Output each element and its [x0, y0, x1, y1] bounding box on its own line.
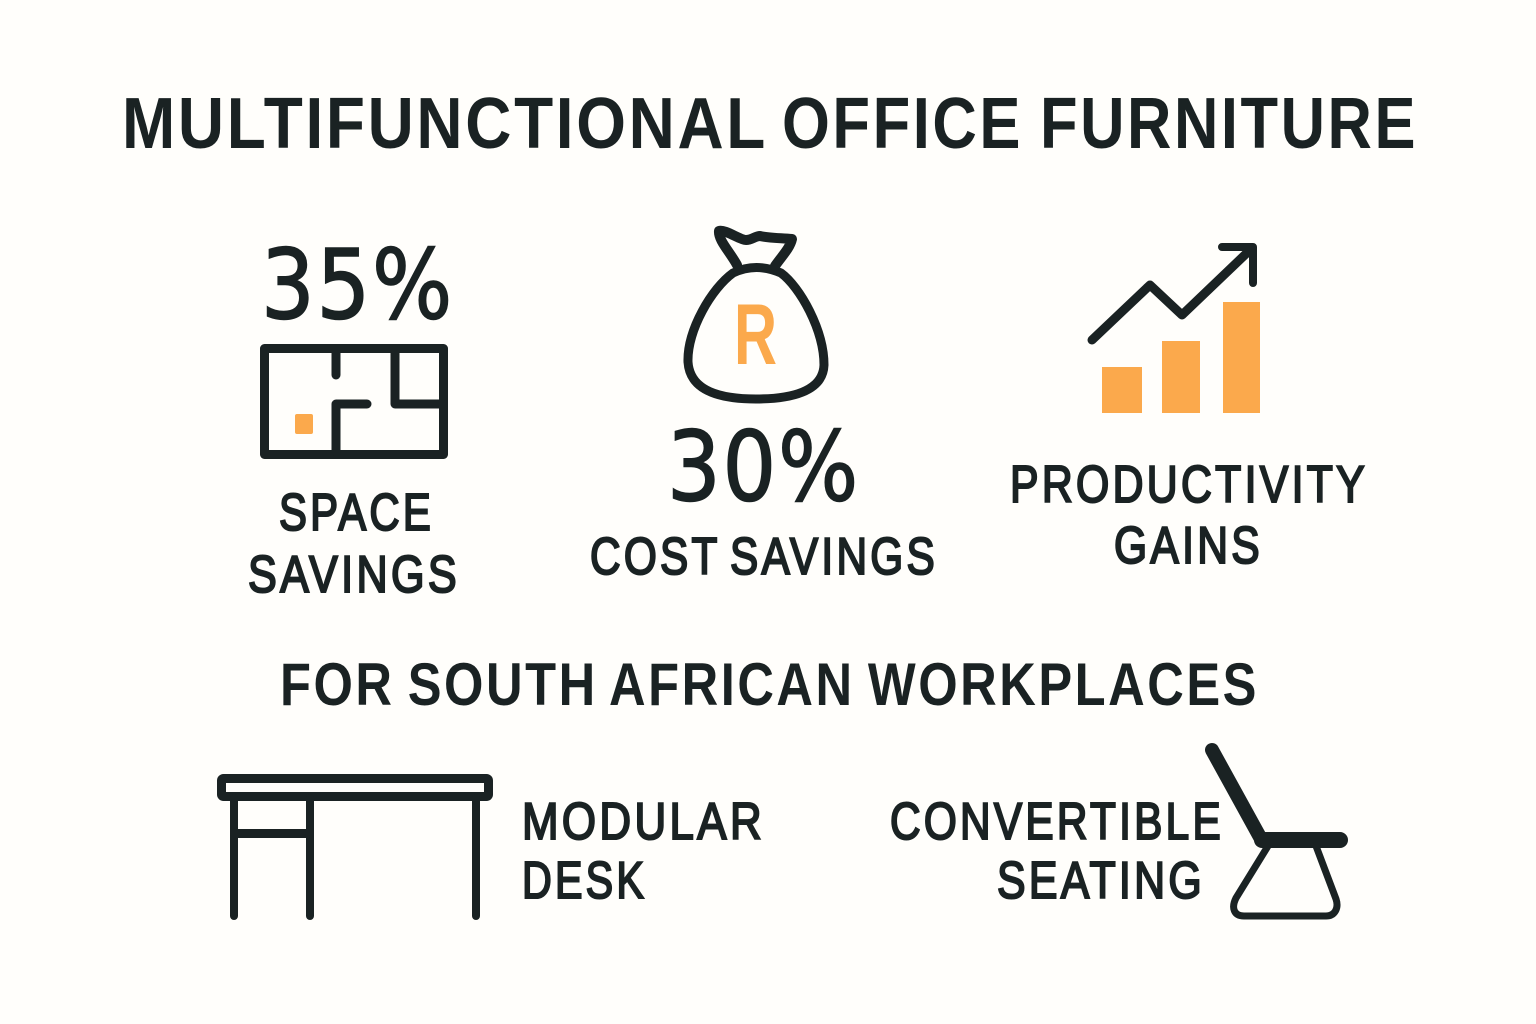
- label: modular desk: [522, 793, 765, 910]
- label: productivity gains: [1010, 456, 1368, 575]
- label: convertible seating: SEATING: [997, 852, 1205, 910]
- title: OFFICE: [782, 84, 1023, 164]
- title: FURNITURE: [1040, 84, 1418, 164]
- label: convertible seating: [890, 793, 1224, 910]
- label: modular desk: DESK: [522, 852, 647, 910]
- panel: space savings: [248, 229, 460, 604]
- label: productivity gains: PRODUCTIVITY: [1010, 456, 1368, 514]
- icon: chair: [1212, 750, 1340, 916]
- label: cost savings: COST SAVINGS: [590, 528, 938, 586]
- panel: cost savings: [590, 231, 938, 586]
- panel: modular desk: [222, 778, 765, 916]
- label: productivity gains: GAINS: [1114, 517, 1263, 575]
- title: MULTIFUNCTIONAL: [122, 84, 768, 164]
- panel: productivity gains: [1010, 247, 1368, 575]
- icon: floor plan: [264, 348, 444, 454]
- panel: convertible seating: [890, 750, 1340, 916]
- stat: 35%: 35%: [261, 229, 454, 341]
- icon: growth chart: [1092, 247, 1260, 413]
- label: space savings: SAVINGS: [248, 546, 460, 604]
- label: modular desk: MODULAR: [522, 793, 765, 851]
- label: space savings: SPACE: [279, 484, 434, 542]
- subtitle: FOR SOUTH AFRICAN WORKPLACES: [280, 651, 1259, 718]
- stat: 30%: 30%: [667, 411, 860, 523]
- title: [122, 84, 1418, 164]
- icon: money bag: [688, 231, 824, 399]
- label: space savings: [248, 484, 460, 604]
- icon: desk: [222, 778, 488, 916]
- label: convertible seating: CONVERTIBLE: [890, 793, 1224, 851]
- icon letter: R: R: [734, 287, 777, 383]
